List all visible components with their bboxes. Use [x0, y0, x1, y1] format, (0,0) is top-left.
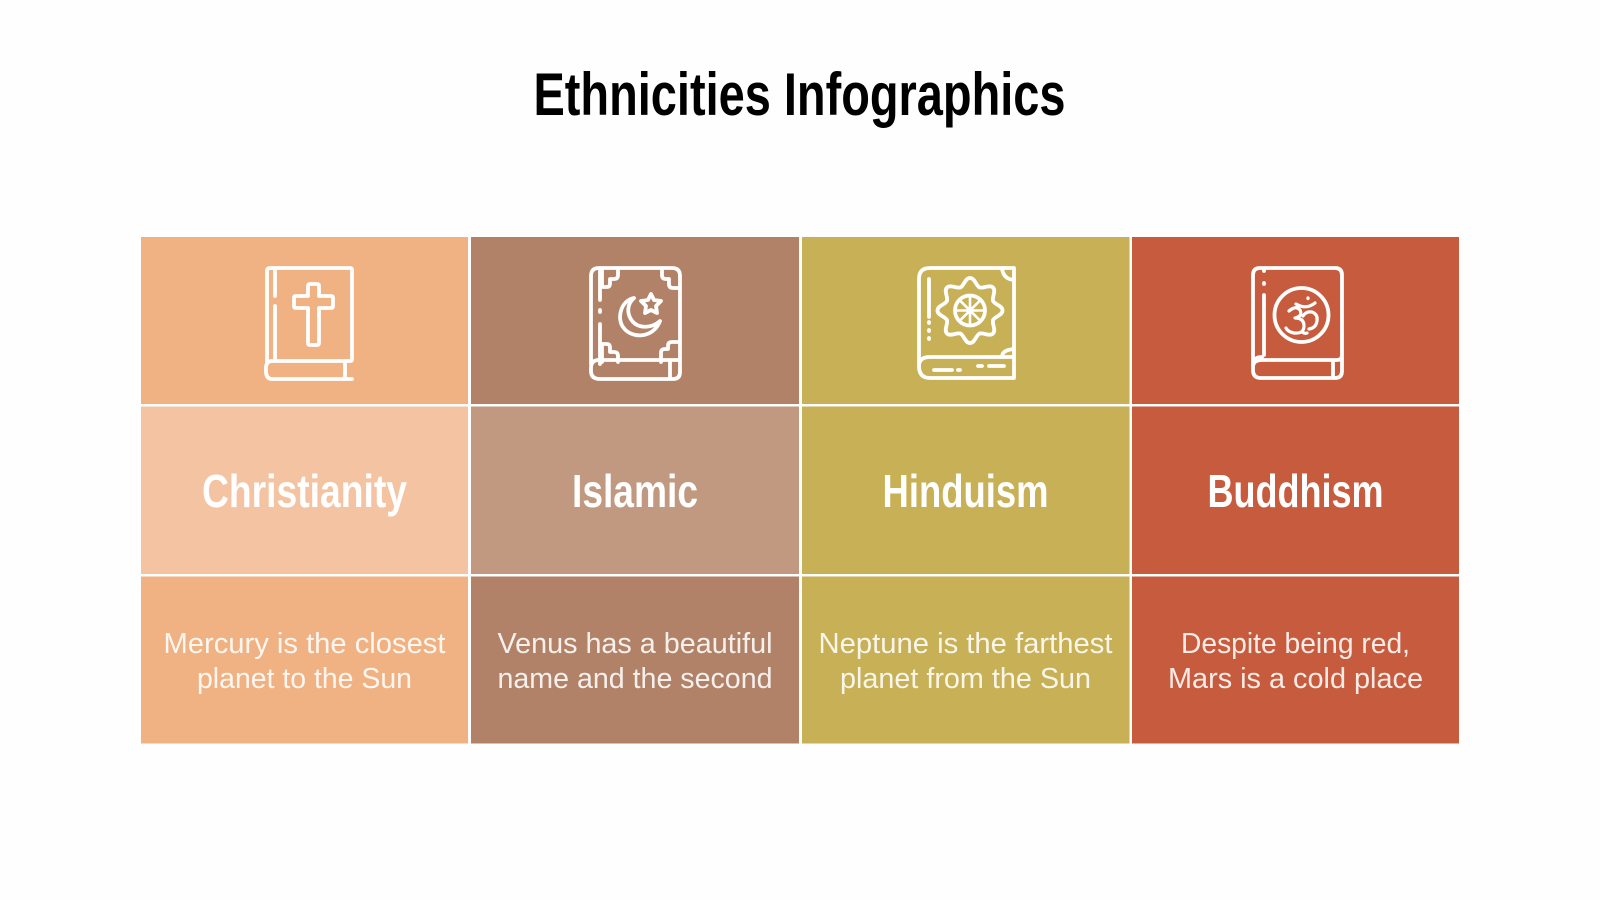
- icon cell: christianity: [141, 237, 468, 404]
- heading: christianity: Christianity: [202, 465, 407, 517]
- name cell: islamic: [471, 406, 799, 574]
- icon cell: buddhism: [1132, 237, 1459, 404]
- text: buddhism: [1168, 628, 1423, 695]
- icon cell: hinduism: [802, 237, 1130, 404]
- icon: book with dharma wheel: [919, 268, 1014, 378]
- text: buddhism: Despite being red,: [1181, 628, 1410, 660]
- heading: islamic: Islamic: [572, 465, 698, 517]
- panel: buddhism: [1132, 237, 1459, 744]
- text: hinduism: [818, 628, 1112, 695]
- panel: hinduism: [802, 237, 1130, 744]
- text: islamic: name and the second: [498, 663, 772, 695]
- icon: quran with crescent: [591, 268, 680, 379]
- name cell: hinduism: [802, 406, 1130, 574]
- text cell: hinduism: [802, 576, 1130, 744]
- text: buddhism: Mars is a cold place: [1168, 663, 1423, 695]
- icon: book with om: [1253, 268, 1342, 378]
- text: hinduism: Neptune is the farthest: [818, 628, 1112, 660]
- text: hinduism: planet from the Sun: [840, 663, 1091, 695]
- name cell: christianity: [141, 406, 468, 574]
- text: islamic: Venus has a beautiful: [498, 628, 772, 660]
- text cell: christianity: [141, 576, 468, 744]
- text: islamic: [498, 628, 772, 695]
- text: christianity: Mercury is the closest: [164, 628, 446, 660]
- heading: buddhism: Buddhism: [1208, 465, 1384, 517]
- text cell: buddhism: [1132, 576, 1459, 744]
- text cell: islamic: [471, 576, 799, 744]
- name cell: buddhism: [1132, 406, 1459, 574]
- heading: hinduism: Hinduism: [882, 465, 1048, 517]
- icon cell: islamic: [471, 237, 799, 404]
- title: Ethnicities Infographics: [534, 61, 1066, 128]
- text: christianity: [164, 628, 446, 695]
- text: christianity: planet to the Sun: [197, 663, 412, 695]
- icon: bible with cross: [266, 268, 352, 379]
- panel: christianity: [141, 237, 468, 744]
- panel: islamic: [471, 237, 799, 744]
